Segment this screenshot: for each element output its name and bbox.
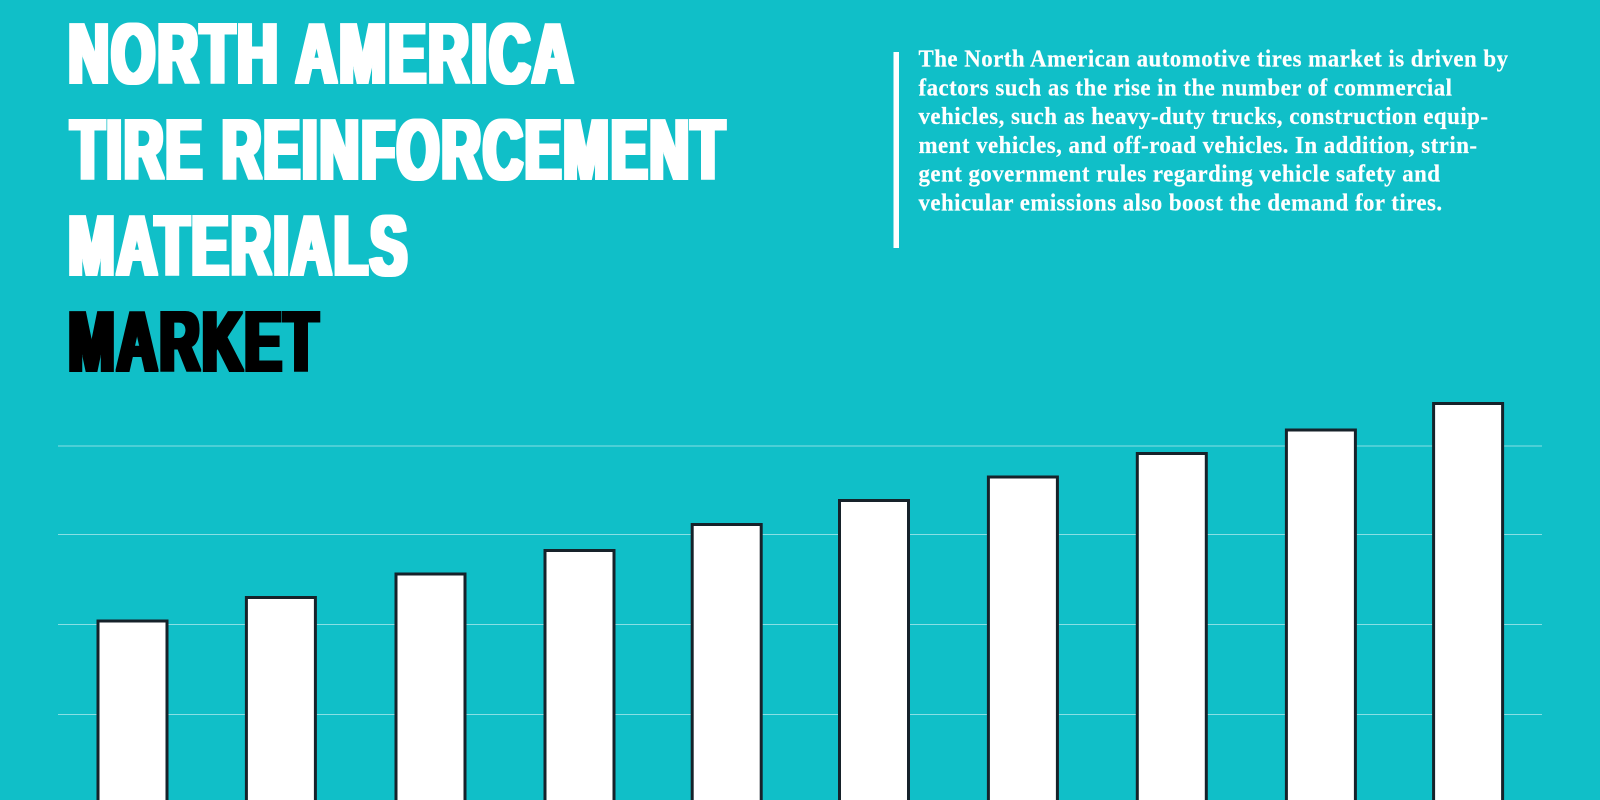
bar 1: [98, 621, 167, 800]
bar 3: [396, 574, 465, 800]
bar 2: [246, 598, 315, 800]
description text block: vehicular emissions also boost the demand for tires.: [918, 190, 1442, 216]
bar 9: [1286, 430, 1355, 800]
description text block: The North American automotive tires market is driven by: [918, 46, 1508, 72]
description text block: factors such as the rise in the number of commercial: [918, 76, 1452, 102]
title: NORTH AMERICA: [68, 7, 576, 102]
title: TIRE REINFORCEMENT: [71, 103, 727, 198]
title: [68, 7, 727, 390]
bar 10: [1434, 404, 1503, 800]
bar 7: [988, 477, 1057, 800]
bar chart: [58, 404, 1542, 800]
bar 8: [1137, 454, 1206, 800]
bar 4: [545, 550, 614, 800]
description text block: ment vehicles, and off-road vehicles. In addition, strin-: [918, 133, 1478, 159]
title: MATERIALS: [68, 199, 410, 294]
title: MARKET: [68, 295, 320, 390]
description text block: gent government rules regarding vehicle safety and: [918, 162, 1441, 188]
description text block: vehicles, such as heavy-duty trucks, construction equip-: [918, 104, 1488, 130]
accent bar beside description: [894, 52, 899, 248]
bar 5: [692, 524, 761, 800]
bar 6: [840, 500, 908, 800]
description text block: [918, 46, 1508, 216]
